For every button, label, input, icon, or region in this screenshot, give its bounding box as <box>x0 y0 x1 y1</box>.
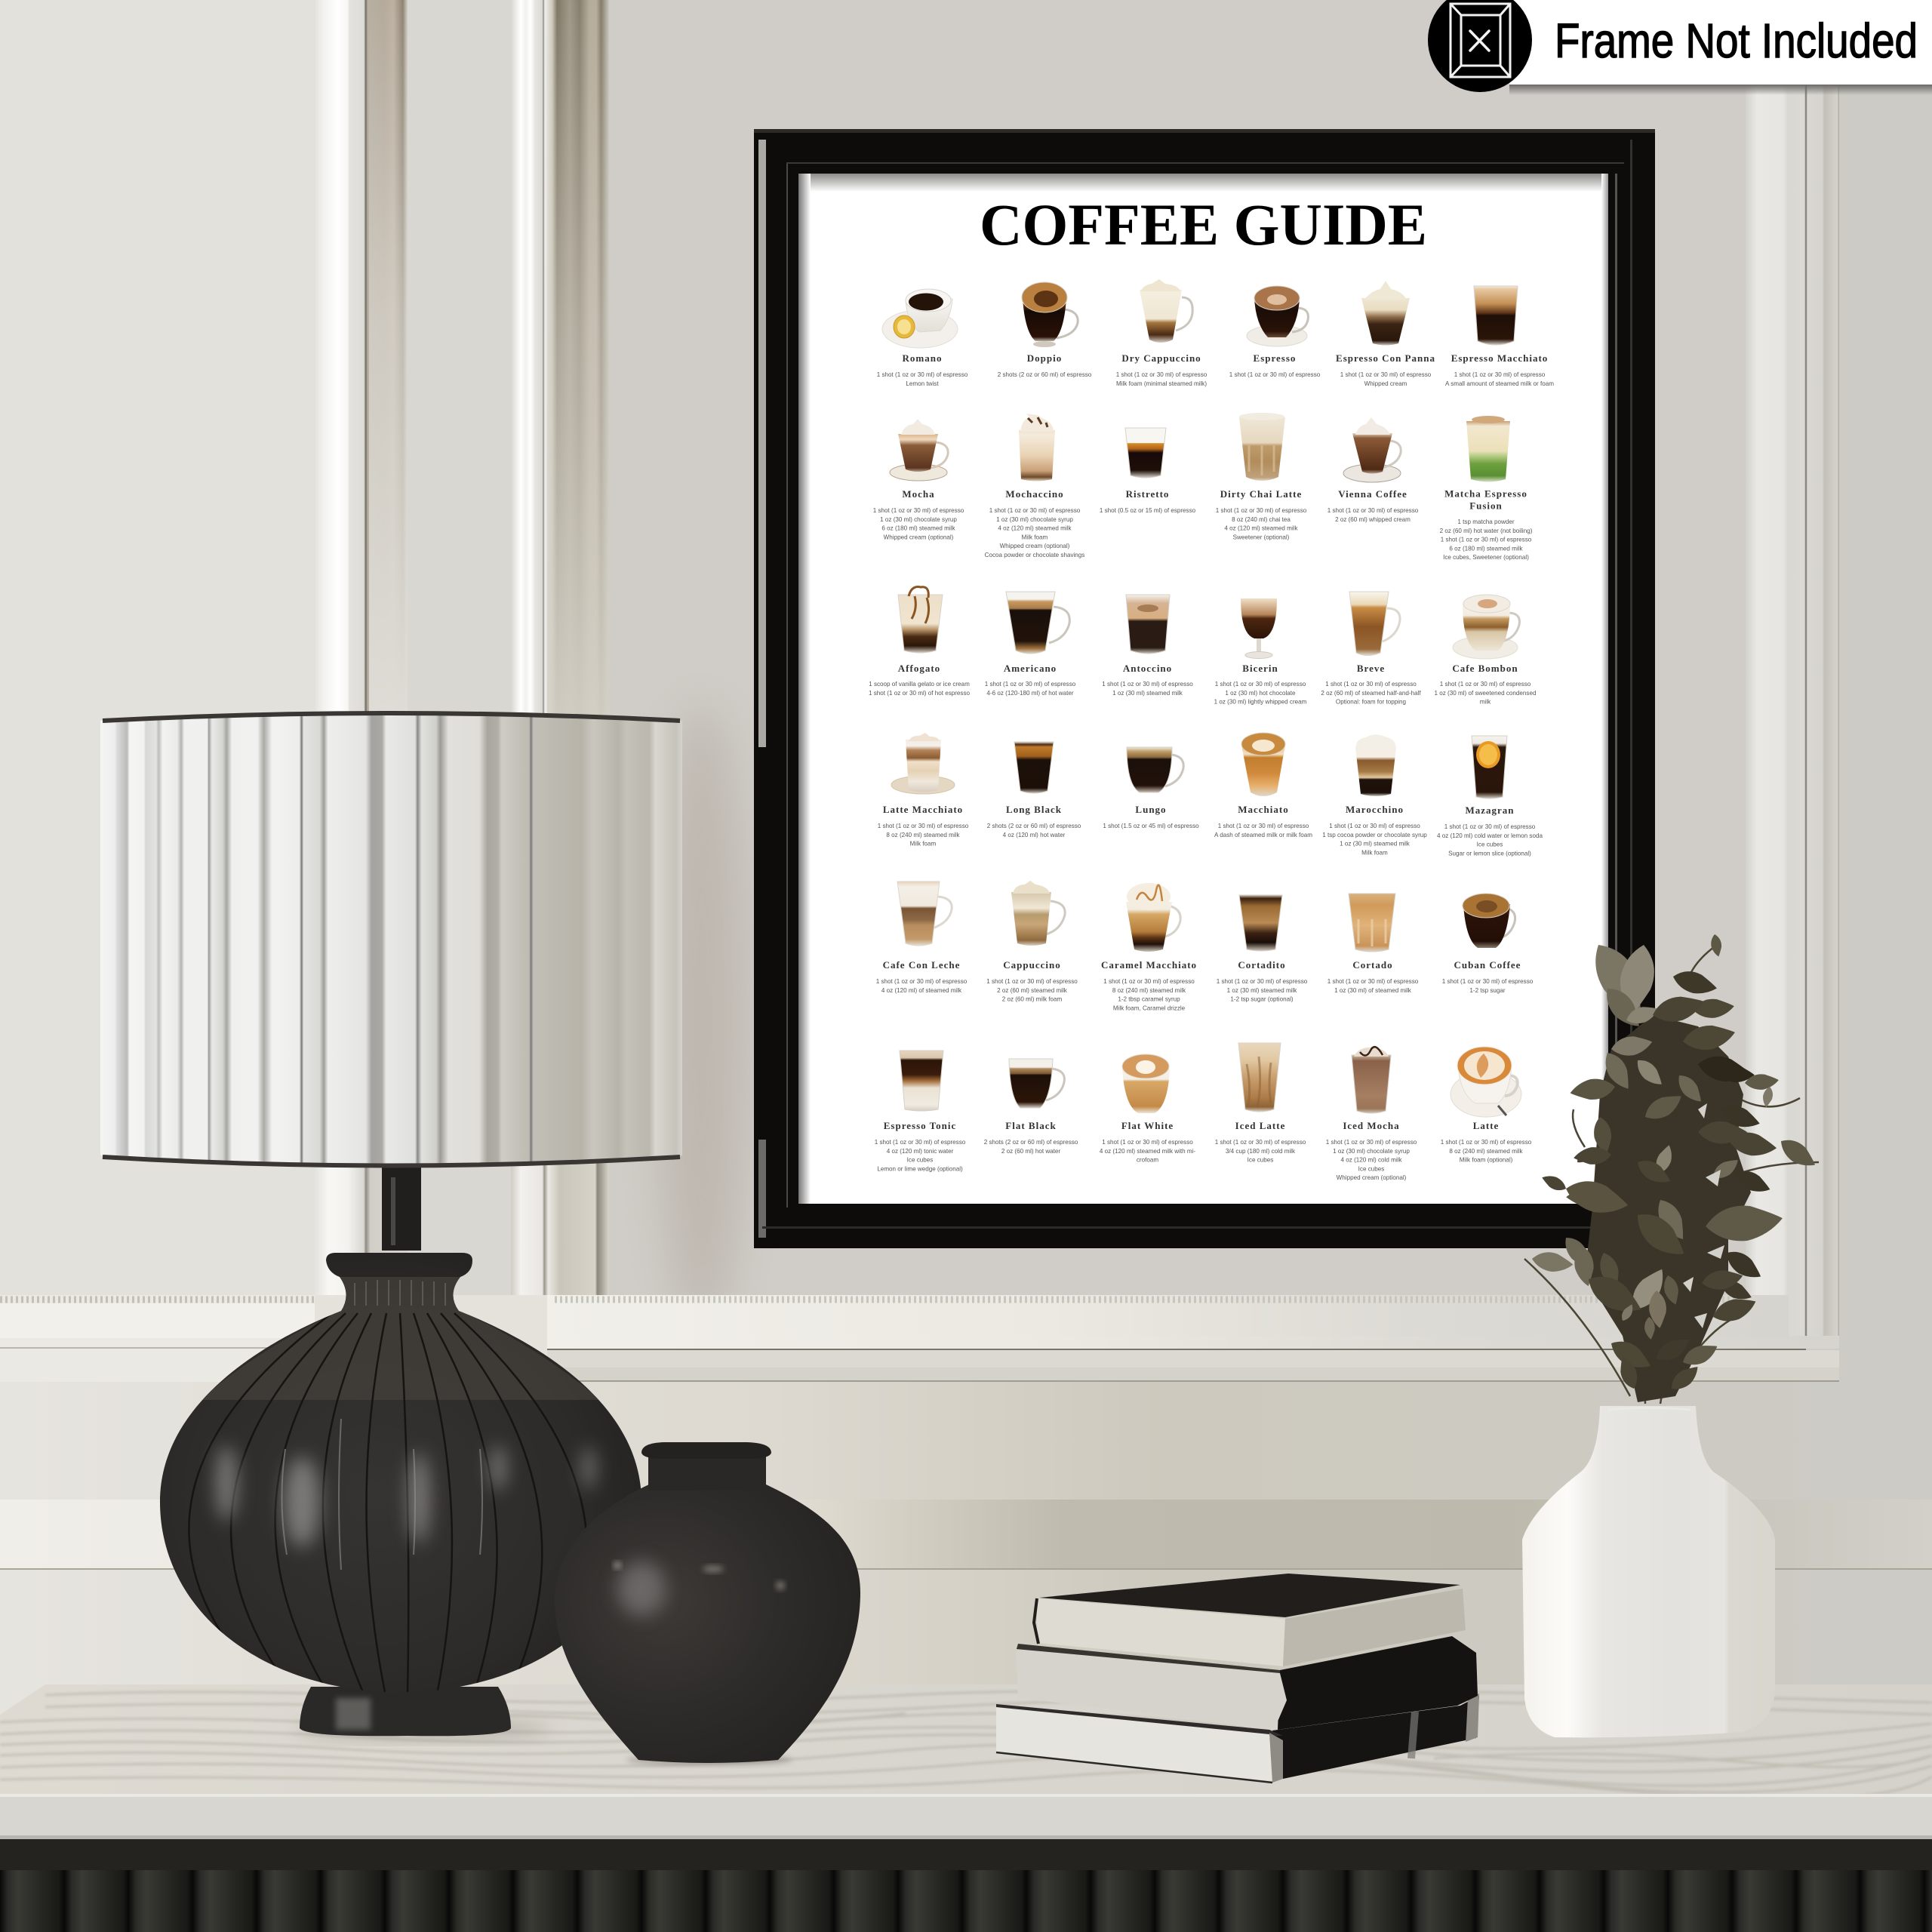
drink: Ristretto: Ristretto <box>1126 488 1169 500</box>
drink: Doppio: Doppio <box>1027 352 1062 364</box>
plant gaps <box>1683 1103 1724 1328</box>
drink: Bicerin: 1 oz (30 ml) hot chocolate <box>1225 690 1296 697</box>
drink: Flat White: Flat White <box>1121 1120 1174 1131</box>
drink: Lungo <box>1103 747 1199 829</box>
drink: Marocchino: 1 shot (1 oz or 30 ml) of espresso <box>1329 823 1420 829</box>
drink: Mazagran: Sugar or lemon slice (optional) <box>1448 850 1531 857</box>
drink: Latte Macchiato: 1 shot (1 oz or 30 ml) of espresso <box>878 823 969 829</box>
dark cabinet with ribs <box>0 1839 1932 1932</box>
drink: Vienna Coffee <box>1327 417 1419 523</box>
drink: Romano: Lemon twist <box>906 380 939 387</box>
drink: Iced Latte: Iced Latte <box>1235 1120 1285 1131</box>
drink: Espresso Tonic: 1 shot (1 oz or 30 ml) of espresso <box>875 1139 966 1146</box>
drink: Matcha Espresso Fusion: 1 shot (1 oz or 30 ml) of espresso <box>1441 537 1532 543</box>
drink: Espresso Con Panna: Espresso Con Panna <box>1336 352 1435 364</box>
lamp neck <box>382 1166 421 1251</box>
drink: Mocha: Whipped cream (optional) <box>884 534 954 540</box>
drink: Iced Mocha: Whipped cream (optional) <box>1337 1174 1407 1181</box>
drink: Macchiato <box>1214 733 1312 838</box>
drink: Espresso <box>1229 286 1321 378</box>
drink: Matcha Espresso Fusion: 2 oz (60 ml) hot water (not boiling) <box>1440 528 1533 534</box>
plant mass <box>1585 1015 1751 1402</box>
drink: Caramel Macchiato: Milk foam, Caramel drizzle <box>1113 1004 1186 1011</box>
drink: Antoccino <box>1102 595 1193 697</box>
drink: Dry Cappuccino: Dry Cappuccino <box>1121 352 1201 364</box>
drink: Antoccino: 1 shot (1 oz or 30 ml) of espresso <box>1102 681 1193 688</box>
drink: Espresso Tonic: Ice cubes <box>907 1157 933 1164</box>
drink: Romano: Romano <box>903 352 942 364</box>
drink: Cafe Con Leche: 4 oz (120 ml) of steamed milk <box>881 987 962 994</box>
drink: Espresso Tonic: Espresso Tonic <box>884 1120 956 1131</box>
drink: Latte Macchiato: 8 oz (240 ml) steamed milk <box>886 832 961 838</box>
drink: Vienna Coffee: Vienna Coffee <box>1338 488 1407 500</box>
drink: Flat White: 1 shot (1 oz or 30 ml) of espresso <box>1102 1139 1193 1146</box>
drink: Iced Mocha: 4 oz (120 ml) cold milk <box>1341 1157 1402 1164</box>
drink: Cappuccino: 2 oz (60 ml) steamed milk <box>997 987 1068 994</box>
drink: Espresso Tonic: Lemon or lime wedge (optional) <box>877 1165 963 1172</box>
dried eucalyptus plant <box>1524 934 1820 1404</box>
drink: Latte: Milk foam (optional) <box>1460 1157 1513 1164</box>
drink: Cortado: 1 shot (1 oz or 30 ml) of espresso <box>1327 978 1419 985</box>
drink: Doppio: 2 shots (2 oz or 60 ml) of espresso <box>998 371 1092 378</box>
drink: Bicerin <box>1214 598 1307 706</box>
drink: Mochaccino: Milk foam <box>1022 534 1048 540</box>
drink: Cortado <box>1327 894 1419 994</box>
drink: Romano <box>877 289 968 387</box>
drink: Flat White: crofoam <box>1137 1157 1158 1164</box>
drink: Espresso Macchiato: A small amount of steamed milk or foam <box>1445 380 1554 387</box>
drink: Latte: Latte <box>1473 1120 1499 1131</box>
drink: Cafe Bombon: 1 shot (1 oz or 30 ml) of espresso <box>1440 681 1531 688</box>
drink: Cortado: Cortado <box>1352 959 1393 971</box>
drink: Iced Latte <box>1215 1043 1306 1164</box>
drink: Matcha Espresso Fusion: 1 tsp matcha powder <box>1457 518 1515 525</box>
drink: Latte <box>1441 1047 1532 1164</box>
drink: Breve: Optional: foam for topping <box>1336 699 1406 706</box>
drink: Cafe Bombon: milk <box>1480 699 1491 706</box>
drink: Espresso: Espresso <box>1254 352 1296 364</box>
table front edge <box>0 1794 1932 1839</box>
drink: Matcha Espresso Fusion: Ice cubes, Sweetener (optional) <box>1443 554 1529 561</box>
drink: Flat Black: Flat Black <box>1005 1120 1057 1131</box>
drink: Breve: 2 oz (60 ml) of steamed half-and-half <box>1321 690 1421 697</box>
drink: Long Black <box>987 742 1081 838</box>
drink: Cappuccino: 1 shot (1 oz or 30 ml) of espresso <box>986 978 1078 985</box>
drink: Iced Mocha: 1 shot (1 oz or 30 ml) of espresso <box>1326 1139 1417 1146</box>
drink: Mocha: 6 oz (180 ml) steamed milk <box>881 525 956 532</box>
drink: Americano: 4-6 oz (120-180 ml) of hot water <box>986 690 1074 697</box>
drink: Iced Mocha: Ice cubes <box>1358 1165 1384 1172</box>
drink: Americano <box>985 592 1076 697</box>
drink: Caramel Macchiato: 1-2 tbsp caramel syrup <box>1118 996 1180 1003</box>
drink: Flat White: 4 oz (120 ml) steamed milk with mi- <box>1100 1148 1195 1155</box>
drink: Cortadito: 1 oz (30 ml) steamed milk <box>1227 987 1297 994</box>
drink: Matcha Espresso Fusion: Fusion <box>1469 500 1503 512</box>
drink: Matcha Espresso Fusion <box>1440 416 1533 561</box>
drink: Affogato <box>869 587 971 697</box>
drink: Dirty Chai Latte: Dirty Chai Latte <box>1220 488 1302 500</box>
drink: Espresso Macchiato <box>1445 286 1554 387</box>
drink: Iced Latte: 3/4 cup (180 ml) cold milk <box>1226 1148 1296 1155</box>
drink: Mazagran: 1 shot (1 oz or 30 ml) of espresso <box>1444 823 1536 830</box>
drink: Americano: 1 shot (1 oz or 30 ml) of espresso <box>985 681 1076 688</box>
drink: Cafe Bombon: 1 oz (30 ml) of sweetened condensed <box>1435 690 1536 697</box>
drink: Dirty Chai Latte <box>1216 413 1307 540</box>
picture frame <box>754 129 1655 1248</box>
drink: Marocchino <box>1322 734 1427 856</box>
drink: Dry Cappuccino: Milk foam (minimal steamed milk) <box>1116 380 1207 387</box>
drink: Lungo: Lungo <box>1135 804 1167 815</box>
drink: Bicerin: 1 shot (1 oz or 30 ml) of espresso <box>1215 681 1306 688</box>
drink: Flat White <box>1100 1054 1195 1164</box>
drink: Mochaccino <box>985 414 1084 558</box>
drink: Antoccino: 1 oz (30 ml) steamed milk <box>1112 690 1183 697</box>
drink: Dirty Chai Latte: 1 shot (1 oz or 30 ml) of espresso <box>1216 507 1307 514</box>
drink: Espresso Tonic <box>875 1051 966 1172</box>
drink: Cafe Bombon <box>1435 595 1536 706</box>
drink: Espresso Tonic: 4 oz (120 ml) tonic water <box>887 1148 954 1155</box>
drink: Mazagran: Mazagran <box>1465 804 1515 816</box>
drink: Marocchino: 1 oz (30 ml) steamed milk <box>1340 841 1411 848</box>
drink: Dry Cappuccino: 1 shot (1 oz or 30 ml) of espresso <box>1116 371 1208 378</box>
drink: Cafe Con Leche: 1 shot (1 oz or 30 ml) of espresso <box>876 978 968 985</box>
drink: Cuban Coffee: 1-2 tsp sugar <box>1469 987 1506 994</box>
drink: Mocha <box>873 419 964 540</box>
drink: Cafe Con Leche: Cafe Con Leche <box>883 959 960 971</box>
lamp shade <box>100 712 682 1165</box>
drink: Cortadito: 1 shot (1 oz or 30 ml) of espresso <box>1217 978 1308 985</box>
middle book <box>1016 1636 1478 1730</box>
drink: Marocchino: Milk foam <box>1361 849 1388 856</box>
icon: crossed frame <box>1428 0 1532 92</box>
top book <box>1034 1574 1466 1666</box>
drink: Americano: Americano <box>1004 663 1057 674</box>
poster <box>798 174 1608 1204</box>
drink: Iced Mocha: Iced Mocha <box>1343 1120 1400 1131</box>
drink: Romano: 1 shot (1 oz or 30 ml) of espresso <box>877 371 968 378</box>
drink: Bicerin: 1 oz (30 ml) lightly whipped cream <box>1214 699 1307 706</box>
drink: Dry Cappuccino <box>1116 279 1208 387</box>
drink: Dirty Chai Latte: 8 oz (240 ml) chai tea <box>1232 516 1291 523</box>
drink: Iced Latte: 1 shot (1 oz or 30 ml) of espresso <box>1215 1139 1306 1146</box>
drink: Caramel Macchiato: Caramel Macchiato <box>1101 959 1197 971</box>
drink: Latte: 8 oz (240 ml) steamed milk <box>1449 1148 1524 1155</box>
drink: Flat Black: 2 shots (2 oz or 60 ml) of espresso <box>984 1139 1078 1146</box>
drink: Flat Black <box>984 1059 1078 1155</box>
drink: Dirty Chai Latte: Sweetener (optional) <box>1233 534 1290 540</box>
drink: Cappuccino: 2 oz (60 ml) milk foam <box>1002 996 1063 1003</box>
drink: Espresso Macchiato: Espresso Macchiato <box>1451 352 1548 364</box>
drink: Mochaccino: Mochaccino <box>1005 488 1064 500</box>
drink: Cortado: 1 oz (30 ml) of steamed milk <box>1334 987 1412 994</box>
drink: Macchiato: A dash of steamed milk or milk foam <box>1214 832 1312 838</box>
drink: Ristretto <box>1100 428 1196 514</box>
drink: Mocha: Mocha <box>902 488 935 500</box>
drink: Mochaccino: Whipped cream (optional) <box>1000 543 1070 549</box>
drink: Iced Latte: Ice cubes <box>1247 1157 1273 1164</box>
drink: Latte Macchiato: Latte Macchiato <box>883 804 963 815</box>
drink: Mazagran: 4 oz (120 ml) cold water or lemon soda <box>1437 832 1543 839</box>
drink: Breve: Breve <box>1357 663 1385 674</box>
lamp base <box>160 1253 641 1739</box>
drink: Latte: 1 shot (1 oz or 30 ml) of espresso <box>1441 1139 1532 1146</box>
drink: Breve: 1 shot (1 oz or 30 ml) of espresso <box>1325 681 1417 688</box>
drink: Macchiato: Macchiato <box>1238 804 1289 815</box>
white vase <box>1522 1406 1775 1737</box>
drink: Mazagran <box>1437 736 1543 857</box>
small black lidded vase <box>555 1442 860 1765</box>
drink: Affogato: 1 scoop of vanilla gelato or ice cream <box>869 681 970 688</box>
drink: Vienna Coffee: 1 shot (1 oz or 30 ml) of espresso <box>1327 507 1419 514</box>
drink: Long Black: 4 oz (120 ml) hot water <box>1003 832 1066 838</box>
drink: Iced Mocha: 1 oz (30 ml) chocolate syrup <box>1333 1148 1410 1155</box>
drink: Mazagran: Ice cubes <box>1477 841 1503 848</box>
drink: Antoccino: Antoccino <box>1123 663 1172 674</box>
drink: Latte Macchiato: Milk foam <box>910 841 937 848</box>
drink: Affogato: Affogato <box>898 663 940 674</box>
drink: Cafe Bombon: Cafe Bombon <box>1452 663 1518 674</box>
drink: Long Black: Long Black <box>1006 804 1062 815</box>
drink: Long Black: 2 shots (2 oz or 60 ml) of espresso <box>987 823 1081 829</box>
drink: Mocha: 1 shot (1 oz or 30 ml) of espresso <box>873 507 964 514</box>
plant stems <box>1524 945 1819 1404</box>
drink: Flat Black: 2 oz (60 ml) hot water <box>1001 1148 1060 1155</box>
drink: Ristretto: 1 shot (0.5 oz or 15 ml) of espresso <box>1100 507 1196 514</box>
drink: Mochaccino: 4 oz (120 ml) steamed milk <box>998 525 1072 532</box>
drink: Cuban Coffee: Cuban Coffee <box>1454 959 1521 971</box>
drink: Mocha: 1 oz (30 ml) chocolate syrup <box>880 516 957 523</box>
drink: Cortadito: Cortadito <box>1238 959 1286 971</box>
drink: Matcha Espresso Fusion: Matcha Espresso <box>1444 488 1527 500</box>
bottom book <box>996 1694 1479 1783</box>
drink: Affogato: 1 shot (1 oz or 30 ml) of hot espresso <box>869 690 971 697</box>
drink: Mochaccino: 1 shot (1 oz or 30 ml) of espresso <box>989 507 1081 514</box>
drink: Espresso Con Panna: Whipped cream <box>1364 380 1407 387</box>
drink: Marocchino: 1 tsp cocoa powder or chocolate syrup <box>1322 832 1427 838</box>
drink: Espresso Macchiato: 1 shot (1 oz or 30 ml) of espresso <box>1454 371 1546 378</box>
drink: Espresso Con Panna: 1 shot (1 oz or 30 ml) of espresso <box>1340 371 1432 378</box>
drink: Dirty Chai Latte: 4 oz (120 ml) steamed milk <box>1224 525 1299 532</box>
drink: Marocchino: Marocchino <box>1346 804 1404 815</box>
plant leaves <box>1531 934 1820 1395</box>
drink: Espresso: 1 shot (1 oz or 30 ml) of espresso <box>1229 371 1321 378</box>
drink: Cortadito: 1-2 tsp sugar (optional) <box>1230 996 1294 1003</box>
drink: Cuban Coffee <box>1442 894 1534 994</box>
drink: Breve <box>1321 592 1421 706</box>
badge: frame not included <box>1428 0 1932 95</box>
drink: Cappuccino <box>986 881 1078 1003</box>
drink: Bicerin: Bicerin <box>1242 663 1278 674</box>
drink: Cortadito <box>1217 895 1308 1003</box>
drink: Caramel Macchiato: 1 shot (1 oz or 30 ml) of espresso <box>1103 978 1195 985</box>
drink: Macchiato: 1 shot (1 oz or 30 ml) of espresso <box>1218 823 1309 829</box>
drink: Caramel Macchiato <box>1101 883 1197 1011</box>
drink: Cuban Coffee: 1 shot (1 oz or 30 ml) of espresso <box>1442 978 1534 985</box>
drink: Espresso Con Panna <box>1336 281 1435 387</box>
drink: Caramel Macchiato: 8 oz (240 ml) steamed milk <box>1112 987 1186 994</box>
drink: Cafe Con Leche <box>876 881 968 994</box>
drink: Latte Macchiato <box>878 733 969 848</box>
title: COFFEE GUIDE <box>980 192 1427 257</box>
drink: Vienna Coffee: 2 oz (60 ml) whipped cream <box>1335 516 1411 523</box>
drink: Cappuccino: Cappuccino <box>1003 959 1061 971</box>
table top with marble waves <box>0 1684 1932 1799</box>
drink: Mochaccino: 1 oz (30 ml) chocolate syrup <box>996 516 1073 523</box>
drink: Lungo: 1 shot (1.5 oz or 45 ml) of espresso <box>1103 823 1199 829</box>
stack of books <box>996 1574 1479 1783</box>
drink: Doppio <box>998 282 1092 378</box>
drink: Iced Mocha <box>1326 1047 1417 1181</box>
drink: Mochaccino: Cocoa powder or chocolate shavings <box>985 552 1084 558</box>
drink: Matcha Espresso Fusion: 6 oz (180 ml) steamed milk <box>1449 545 1524 552</box>
